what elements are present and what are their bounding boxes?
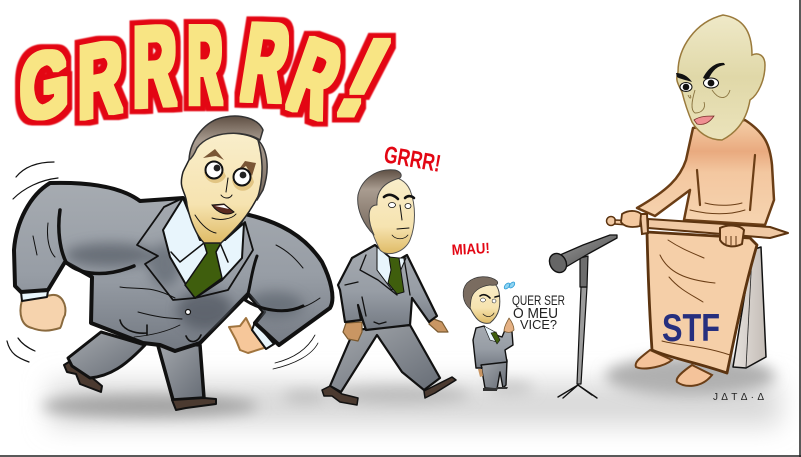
motion lines [7, 162, 318, 369]
small man [463, 277, 516, 391]
right hand [229, 318, 267, 353]
stand clamp [580, 256, 588, 287]
title: GRRRRR!: R [234, 1, 296, 126]
tie [185, 243, 222, 298]
jacket [14, 183, 332, 351]
hair [358, 170, 401, 235]
title: GRRRRR!: R [78, 19, 122, 142]
sword [648, 219, 788, 238]
legs [481, 360, 507, 389]
STF judge [606, 15, 788, 386]
lower hand [478, 369, 483, 377]
right foot [677, 365, 712, 386]
head [181, 133, 265, 243]
back leg [68, 332, 145, 378]
shirt and tie [484, 326, 497, 342]
medium man [322, 170, 456, 405]
button [186, 310, 190, 314]
lapels [345, 255, 410, 324]
lapels and folds [33, 198, 320, 342]
big angry man [7, 116, 332, 410]
pupils [683, 84, 689, 90]
eyes [206, 162, 222, 178]
text: MIAU!: MIAU! [451, 240, 490, 259]
left fist [20, 295, 65, 331]
facial features [480, 295, 499, 317]
eyes [680, 82, 692, 92]
tie [388, 257, 404, 294]
shoes [483, 387, 508, 391]
shirt [377, 247, 406, 290]
pupils [214, 165, 246, 178]
text: STF: STF [662, 307, 720, 350]
throne [733, 247, 766, 368]
speech text: QUER SER O MEU VICE?: VICE? [520, 317, 557, 332]
right cuff [252, 322, 274, 349]
legs [330, 325, 440, 392]
hilt [615, 220, 640, 226]
mic head [546, 250, 570, 276]
title: GRRRRR! [20, 1, 408, 142]
facial features [384, 195, 414, 239]
speech text: QUER SER O MEU VICE?: QUER SER [512, 293, 565, 308]
eye bags [204, 172, 254, 191]
head [465, 279, 500, 323]
guard [640, 214, 648, 234]
left foot [636, 350, 672, 368]
shirt [163, 198, 244, 298]
stand base [558, 385, 597, 398]
back shoe [64, 360, 102, 392]
front leg [157, 342, 204, 400]
stand pole [577, 287, 587, 384]
pommel [606, 216, 616, 226]
title: GRRRRR!: R [188, 4, 222, 129]
pointing hand [504, 318, 514, 332]
mouth [694, 116, 714, 125]
right hand [720, 226, 744, 246]
mouth [212, 204, 234, 214]
brows [203, 149, 256, 176]
sweat drops [503, 281, 516, 290]
jacket [473, 326, 513, 368]
mic body [560, 235, 617, 267]
jacket shading [65, 243, 303, 330]
shoes [322, 377, 456, 405]
left hand [343, 322, 362, 341]
head [677, 15, 765, 140]
left cuff [21, 291, 48, 301]
text: GRRR!: GRRR! [382, 141, 443, 178]
title: GRRRRR!: R [276, 15, 354, 141]
face lines [688, 90, 730, 113]
hair [463, 277, 498, 309]
collar [171, 243, 228, 262]
speech text: QUER SER O MEU VICE? [512, 293, 565, 332]
jacket [338, 245, 437, 330]
title: GRRRRR!: ! [319, 18, 408, 139]
speech text: QUER SER O MEU VICE?: O MEU [513, 306, 558, 322]
brows [676, 63, 725, 82]
hair [189, 116, 267, 200]
right hand [429, 318, 448, 332]
title: GRRRRR!: G [20, 27, 69, 142]
signature: JΔTΔ·Δ [713, 392, 764, 403]
head [361, 177, 414, 254]
robe lower [647, 232, 757, 373]
face lines [195, 178, 236, 233]
title: GRRRRR!: R [133, 2, 176, 132]
front shoe [172, 398, 216, 410]
ground shadows [42, 356, 780, 426]
left hand [621, 211, 641, 227]
robe folds [660, 155, 755, 355]
microphone [546, 235, 617, 398]
torso and arm [637, 120, 774, 225]
